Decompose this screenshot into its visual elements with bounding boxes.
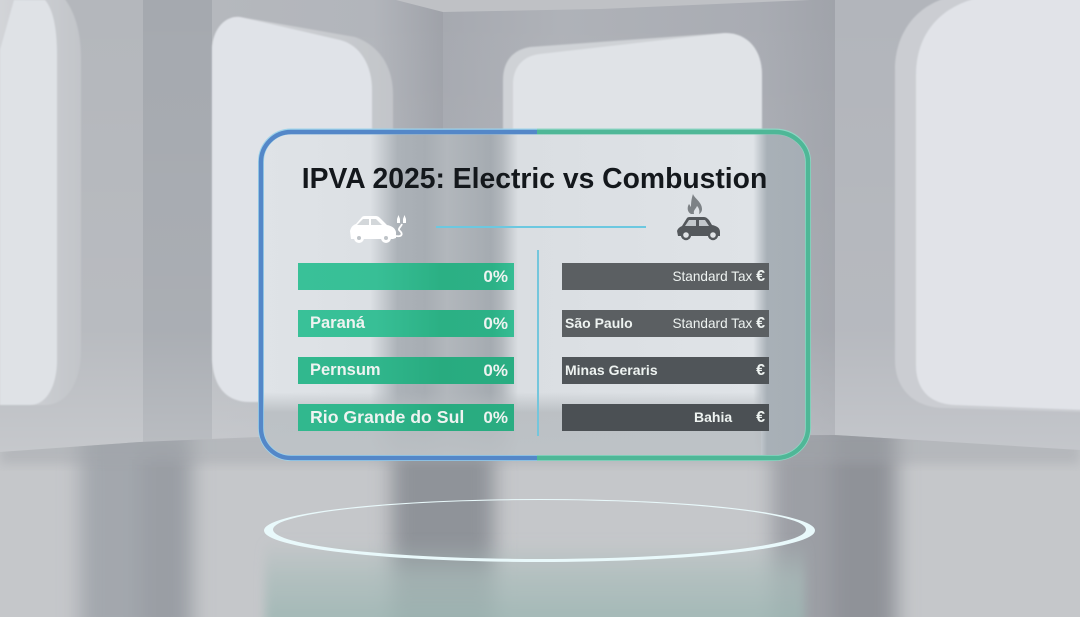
icon: electric car with plug — [350, 215, 406, 243]
floor ring — [264, 499, 815, 562]
combustion row 3: Minas Gerais: Minas Geraris — [565, 362, 658, 378]
combustion row 4: Bahia: Bahia — [694, 409, 732, 425]
combustion row 2: São Paulo — [562, 310, 769, 337]
electric row 3: Pernsum — [298, 357, 514, 384]
combustion row 2: São Paulo: Standard Tax € — [672, 315, 765, 332]
icon: combustion car with flame — [677, 194, 720, 240]
combustion row 4: Bahia: € — [756, 409, 765, 426]
electric row 1: 0% — [483, 267, 508, 286]
electric row 4: Rio Grande do Sul: Rio Grande do Sul — [310, 407, 464, 427]
combustion row 3: Minas Gerais: € — [756, 362, 765, 379]
combustion row 3: Minas Gerais — [562, 357, 769, 384]
electric row 4: Rio Grande do Sul: 0% — [483, 408, 508, 427]
combustion row 1 — [562, 263, 769, 290]
electric row 2: Paraná: Paraná — [310, 314, 365, 332]
electric row 1 — [298, 263, 514, 290]
panel: comparison card — [258, 128, 811, 461]
electric row 4: Rio Grande do Sul — [298, 404, 514, 431]
combustion row 4: Bahia — [562, 404, 769, 431]
floor — [0, 420, 1080, 617]
electric row 2: Paraná — [298, 310, 514, 337]
connector line — [436, 226, 646, 228]
combustion row 2: São Paulo: São Paulo — [565, 315, 633, 331]
title: IPVA 2025: Electric vs Combustion — [302, 162, 767, 194]
electric row 3: Pernsum: 0% — [483, 361, 508, 380]
vertical divider — [537, 250, 539, 436]
combustion row 1: Standard Tax € — [672, 268, 765, 285]
electric row 2: Paraná: 0% — [483, 314, 508, 333]
electric row 3: Pernsum: Pernsum — [310, 361, 381, 379]
